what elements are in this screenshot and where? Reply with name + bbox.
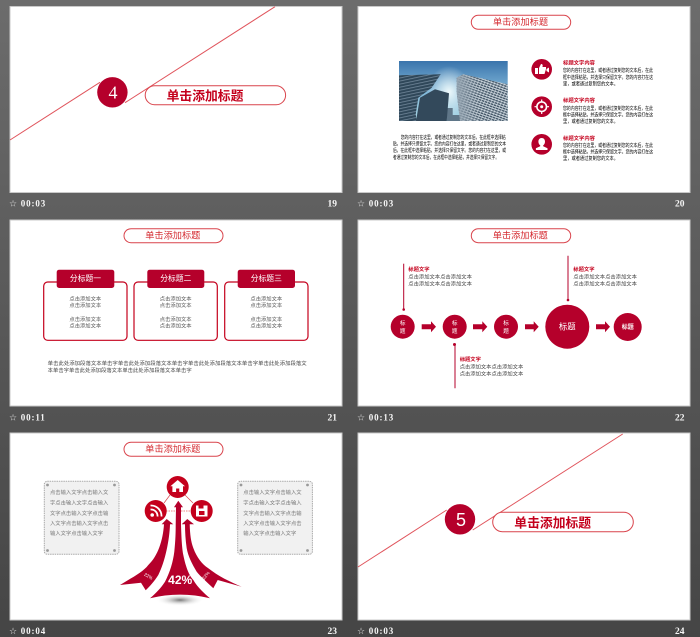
text block: under photo: 后，在此框中选择粘贴，并选择只保留文字。您的内容打在这里，或 (393, 147, 506, 154)
card: sub-heading three: 分标题三 (251, 273, 282, 283)
card: sub-heading one: 点击添加文本 (69, 301, 102, 309)
photo: skyscrapers (399, 61, 508, 121)
text block: point three: 您的内容打在这里，或者通过复制您的文本后，在此 (563, 142, 653, 149)
callout: right top (567, 256, 638, 301)
arrow: left 22% (120, 519, 173, 590)
footer: slide 19 (9, 199, 337, 210)
footer: slide 23: 23 (328, 627, 337, 637)
footer: slide 23: 00:04 (21, 626, 46, 636)
note card: left: 输入文字点击输入文字 (50, 529, 103, 537)
arrow: left 22%: 22% (143, 572, 154, 581)
callout: bottom: 标题文字 (460, 355, 481, 363)
heading: slide 20: 单击添加标题 (493, 16, 548, 27)
arrow 1 (422, 321, 436, 332)
icon: target (531, 96, 552, 117)
text block: point three: 标题文字内容 (563, 134, 596, 142)
text block: point one: 标题文字内容 (563, 58, 596, 66)
card: sub-heading one: 点击添加文本 (69, 322, 102, 330)
footer: slide 24 (357, 626, 685, 637)
footer: slide 20: ☆ (357, 200, 365, 210)
card: sub-heading one: 分标题一 (70, 273, 101, 283)
footer: slide 24: 24 (675, 627, 685, 637)
footer: slide 21: 21 (328, 413, 337, 423)
number badge 5 (445, 504, 475, 534)
text block: point one: 里，或者通过复制您的文本。 (563, 80, 618, 88)
card: sub-heading one: 点击添加文本 (69, 294, 102, 302)
panel: slide 19 section divider (9, 6, 342, 210)
heading: slide 22 (471, 229, 571, 243)
arrow: centre 42%: 42% (168, 573, 193, 587)
number badge 4: 4 (108, 82, 118, 102)
card: sub-heading three: 点击添加文本 (250, 294, 283, 302)
callout: left top (402, 264, 473, 311)
callout: left top: 点击添加文本点击添加文本 (408, 279, 473, 287)
flow node 1: 标 (400, 319, 406, 327)
card: sub-heading two: 分标题二 (160, 273, 192, 283)
note card: right: 输入文字点击输入文字 (243, 529, 296, 537)
text block: point two (563, 96, 653, 125)
callout: bottom (453, 343, 524, 388)
arrow 2 (473, 321, 487, 332)
footer: slide 24: ☆ (357, 627, 365, 637)
text block: point one: 框中选择粘贴，并选择只保留文字。您的内容打在这 (563, 74, 653, 81)
text block: paragraph: 单击此处添加段落文本单击字单击此处添加段落文本单击字单击此处添加段落文本单击字单击此处添加段落文 (48, 359, 307, 367)
card: sub-heading two: 点击添加文本 (160, 322, 192, 330)
text block: point three: 里，或者通过复制您的文本。 (563, 155, 618, 162)
heading: slide 21 (124, 229, 223, 243)
panel: slide 20 image and three points (357, 6, 690, 210)
arrow 3 (525, 321, 539, 332)
footer: slide 20: 00:03 (369, 199, 394, 209)
flow node 1: 题 (400, 328, 406, 335)
callout: bottom: 点击添加文本点击添加文本 (460, 369, 524, 377)
footer: slide 23 (9, 626, 337, 637)
card: sub-heading two (134, 270, 217, 340)
text block: point two: 框中选择粘贴，并选择只保留文字。您的内容打在这 (563, 112, 653, 118)
footer: slide 21 (9, 412, 337, 424)
footer: slide 22: 22 (675, 413, 685, 423)
text block: point two: 您的内容打在这里，或者通过复制您的文本后，在此 (563, 105, 653, 112)
note card: right: 点击输入文字点击输入文 (243, 488, 302, 496)
note card: right: 入文字点击输入文字点击 (243, 519, 302, 527)
flow node 2: 标 (452, 319, 458, 327)
heading: slide 22: 单击添加标题 (493, 230, 548, 241)
note card: right: 字点击输入文字点击输入 (243, 499, 302, 507)
card: sub-heading three: 点击添加文本 (250, 322, 283, 330)
panel: slide 21 three sub-headings (9, 220, 342, 424)
footer: slide 24: 00:03 (369, 626, 394, 636)
callout: right top: 点击添加文本点击添加文本 (573, 279, 638, 287)
callout: right top: 标题文字 (573, 265, 595, 273)
footer: slide 20 (357, 199, 685, 210)
heading: slide 23 (124, 442, 223, 456)
note card: left (44, 481, 119, 554)
flow node 5 (614, 313, 642, 341)
heading: slide 23: 单击添加标题 (145, 443, 200, 454)
card: sub-heading one (44, 270, 127, 340)
card: sub-heading two: 点击添加文本 (160, 294, 192, 302)
note card: left: 点击输入文字点击输入文 (50, 488, 109, 496)
note card: left: 文字点击输入文字点击输 (50, 509, 109, 517)
footer: slide 23: ☆ (9, 627, 17, 637)
footer: slide 22: 00:13 (369, 412, 394, 422)
flow node 2: 题 (452, 328, 458, 335)
callout: left top: 点击添加文本点击添加文本 (408, 273, 473, 281)
icon: floppy disk (191, 500, 213, 522)
note card: left: 入文字点击输入文字点击 (50, 519, 108, 527)
heading: slide 20 (471, 15, 571, 29)
text block: point one: 您的内容打在这里，或者通过复制您的文本后，在此 (563, 67, 653, 74)
text block: point two: 标题文字内容 (563, 96, 596, 104)
footer: slide 22: ☆ (357, 414, 365, 424)
heading: slide 19: 单击添加标题 (167, 88, 244, 104)
number badge 5: 5 (456, 510, 466, 530)
text block: under photo: 您的内容打在这里，或者通过复制您的文本后，在此框中选择粘 (401, 134, 506, 141)
heading: slide 24: 单击添加标题 (514, 516, 591, 531)
panel: slide 22 process flow (357, 220, 690, 424)
panel: slide 24 section divider (357, 433, 690, 637)
text block: point one (563, 58, 653, 88)
heading: slide 24 (493, 512, 633, 532)
card: sub-heading three (225, 270, 308, 340)
arrow: right 22% (182, 519, 242, 588)
footer: slide 21: 00:11 (21, 412, 46, 422)
callout: left top: 标题文字 (408, 265, 430, 273)
flow node 2 (443, 315, 467, 339)
card: sub-heading two: 点击添加文本 (160, 315, 192, 323)
arrow: right 22%: 22% (201, 570, 211, 581)
flow node 3: 题 (503, 328, 509, 335)
card: sub-heading three: 点击添加文本 (250, 301, 283, 309)
card: sub-heading two: 点击添加文本 (160, 301, 192, 309)
text block: point three: 框中选择粘贴，并选择只保留文字。您的内容打在这 (563, 148, 653, 156)
panel: slide 23 arrows diagram (9, 433, 342, 637)
footer: slide 20: 20 (675, 200, 685, 210)
icon: thumbs up (531, 59, 552, 80)
note card: left: 字点击输入文字点击输入 (50, 499, 109, 507)
footer: slide 19: ☆ (9, 200, 17, 210)
flow node 5: 标题 (622, 323, 634, 331)
flow node 3: 标 (503, 319, 509, 327)
note card: right: 文字点击输入文字点击输 (243, 509, 302, 517)
connectors between icons (164, 495, 193, 511)
text block: point three (563, 134, 653, 162)
icon: rss (145, 500, 167, 522)
footer: slide 19: 19 (328, 200, 337, 210)
card: sub-heading one: 点击添加文本 (69, 315, 102, 323)
arrow: centre 42% (150, 501, 210, 598)
flow node 1 (391, 315, 415, 339)
callout: right top: 点击添加文本点击添加文本 (573, 273, 638, 281)
icon: home (167, 476, 189, 498)
shadow below arrows (156, 594, 204, 606)
heading: slide 21: 单击添加标题 (145, 230, 200, 241)
diagonal line: slide 24 (358, 434, 623, 567)
diagonal line: slide 19 (10, 7, 275, 140)
flow node 4 large (545, 305, 589, 349)
callout: bottom: 点击添加文本点击添加文本 (460, 363, 524, 371)
flow node 3 (494, 315, 518, 339)
icon: person (531, 134, 552, 155)
footer: slide 22 (357, 412, 685, 424)
text block: under photo: 者通过复制您的文本后，在此框中选择粘贴，并选择只保留文字。 (393, 154, 499, 161)
text block: paragraph: 本单击字单击此处添加段落文本单击此处添加段落文本单击字 (48, 366, 192, 374)
card: sub-heading three: 点击添加文本 (250, 315, 283, 323)
arrow 4 (596, 321, 610, 332)
number badge 4 (97, 77, 128, 108)
footer: slide 19: 00:03 (21, 199, 46, 209)
note card: right (238, 481, 312, 554)
text block: point two: 里，或者通过复制您的文本。 (563, 118, 618, 125)
footer: slide 21: ☆ (9, 414, 17, 424)
text block: under photo (393, 134, 506, 161)
text block: under photo: 贴，并选择只保留文字。您的内容打在这里，或者通过复制您的文本 (393, 140, 506, 148)
heading: slide 19 (145, 86, 286, 105)
text block: paragraph (48, 359, 307, 374)
flow node 4 large: 标题 (559, 322, 576, 332)
